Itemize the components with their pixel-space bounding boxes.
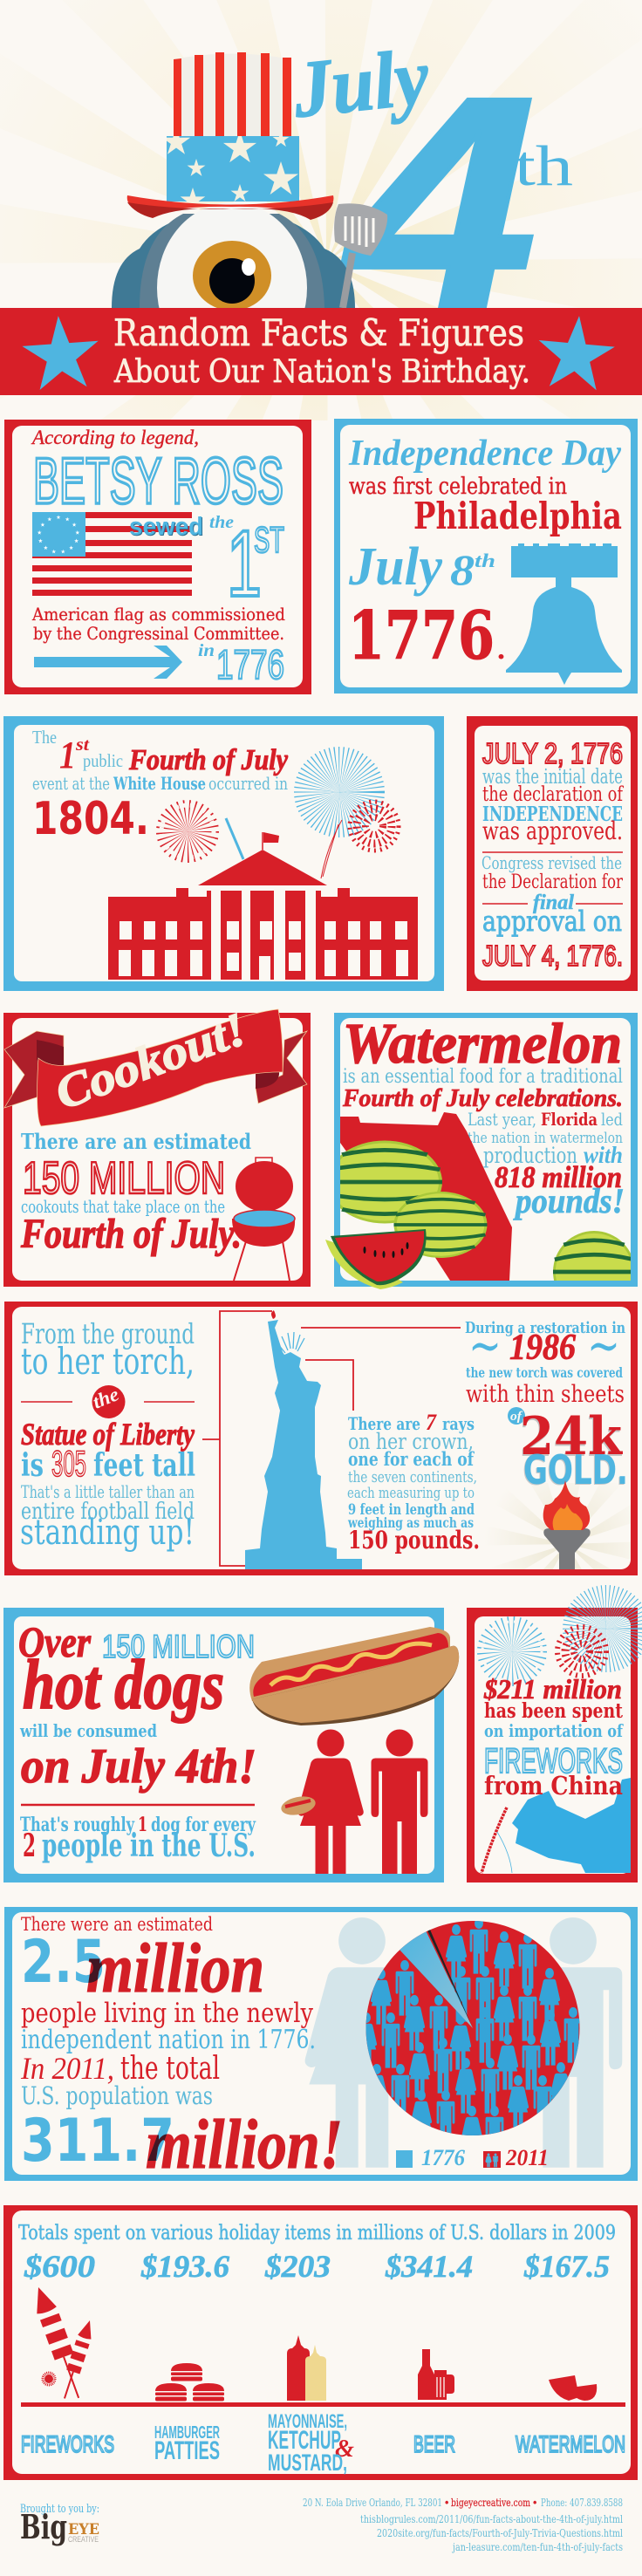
text: address <box>303 2496 623 2509</box>
th suffix: th <box>515 134 573 198</box>
heading: Fourth of July: Fourth of July <box>128 744 289 776</box>
icon: liberty bell <box>506 543 622 685</box>
text: on her crown: on her crown, <box>348 1429 474 1454</box>
text: last year Florida: Florida <box>541 1109 598 1130</box>
text: event at the White House: event at the <box>32 773 110 794</box>
icon: beer <box>418 2349 454 2400</box>
label: beer: BEER <box>413 2431 455 2457</box>
icon: china map <box>512 1778 631 1873</box>
hat star band <box>167 136 299 202</box>
icon: torch <box>543 1480 591 1569</box>
text: credit: Brought to you by: <box>20 2503 99 2516</box>
arrow <box>34 646 182 679</box>
heading: Statue of Liberty: Statue of Liberty <box>21 1417 195 1452</box>
value: patties: $193.6 <box>140 2249 229 2284</box>
text: million: million <box>86 1930 264 2007</box>
text: 818 million: 818 million <box>495 1160 622 1194</box>
text: estimated: There are an estimated <box>21 1129 251 1154</box>
icon: right star <box>535 312 618 392</box>
text: Over: Over <box>18 1617 91 1666</box>
text: roughly one dog: dog for every <box>151 1814 256 1836</box>
icon: american flag <box>32 512 192 596</box>
text: Fourth of July celebrations: Fourth of July celebrations. <box>342 1085 623 1112</box>
text: final: final <box>533 892 574 914</box>
panel: Independence Day <box>334 419 638 694</box>
text: sewed: sewed <box>129 513 203 541</box>
heading: Watermelon: Watermelon <box>343 1012 622 1076</box>
text: event at the White House: White House <box>113 773 206 794</box>
legend: 1776 <box>396 2145 465 2170</box>
background sun rays <box>109 44 545 480</box>
panel: July 2 1776 <box>467 716 638 991</box>
text: football field: entire football field <box>21 1499 195 1525</box>
text: is 305 feet tall <box>21 1443 195 1484</box>
icon: burgers <box>155 2363 224 2401</box>
text: is 305 feet tall: 305 <box>51 1443 86 1484</box>
panel: Cookout <box>3 1002 311 1287</box>
text: seven rays: There are <box>348 1413 420 1434</box>
icon: man and woman <box>297 1729 427 1874</box>
value: fireworks: $600 <box>24 2249 95 2284</box>
text: the: the <box>209 513 234 532</box>
text: 150 pounds: 150 pounds. <box>348 1526 480 1554</box>
text: american flag: American flag as commissioned <box>31 604 285 625</box>
text: 1804: 1804. <box>32 793 149 845</box>
line: torch callout <box>301 1327 461 1329</box>
label: hamburger patties: HAMBURGER <box>154 2423 220 2443</box>
value: beer: $341.4 <box>385 2249 473 2284</box>
text: July 8th <box>348 537 495 597</box>
heading: Independence Day: Independence Day <box>348 434 621 474</box>
icon: melon slices <box>549 2375 597 2401</box>
panel: Betsy Ross <box>4 420 311 694</box>
fireworks <box>482 1607 628 1681</box>
icon: ketchup and mustard <box>287 2335 326 2401</box>
text: Fourth of July: Fourth of July. <box>20 1211 242 1257</box>
text: roughly one dog: That's roughly <box>20 1814 135 1836</box>
iris <box>193 241 271 311</box>
panel: first public Fourth of July <box>3 716 444 991</box>
text: in 2011 the total <box>20 2051 220 2087</box>
bracket: height callout lines <box>202 1311 272 1566</box>
text: 1986 <box>468 1315 620 1377</box>
text: seven continents: the seven continents, <box>348 1468 477 1486</box>
text: each measuring: each measuring up to <box>347 1485 475 1502</box>
logo: Big Eye Creative: Big <box>20 2507 67 2546</box>
text: last year Florida: led <box>601 1109 623 1130</box>
text: pounds: pounds! <box>513 1181 625 1220</box>
heading: Betsy Ross: BETSY ROSS <box>33 444 283 517</box>
text: 9 feet: 9 feet in length and <box>348 1501 475 1519</box>
text: 1776: 1776 <box>216 641 284 687</box>
label: condiments: MAYONNAISE, <box>268 2410 347 2432</box>
text: 211 million: $211 million <box>483 1673 622 1705</box>
text: 24k: 24k <box>520 1406 623 1467</box>
eyeball body <box>112 209 355 308</box>
label: fireworks: FIREWORKS <box>21 2431 114 2457</box>
text: people living: people living in the newly <box>21 1998 313 2029</box>
panel: holiday spending <box>3 2205 638 2480</box>
text: seven rays: rays <box>442 1413 475 1434</box>
text: roughly one dog <box>20 1814 256 1836</box>
big numeral 4: 4 <box>337 32 537 376</box>
label: condiments: MUSTARD, <box>268 2450 347 2476</box>
text: population: U.S. population was <box>21 2081 213 2110</box>
text: 1776: 1776 <box>348 597 495 674</box>
panel: Statue of Liberty <box>4 1302 638 1588</box>
label: condiments: & <box>335 2436 354 2463</box>
icon: watermelon slice <box>325 1229 427 1289</box>
panel: population <box>4 1907 638 2183</box>
text: 1986: 1986 <box>509 1328 576 1368</box>
text: July 8th: 8 <box>450 545 475 594</box>
numeral: 1st: 1 <box>59 734 76 776</box>
text: one for each: one for each of <box>348 1448 475 1470</box>
text: will be consumed: will be consumed <box>19 1720 157 1741</box>
header banner <box>0 308 642 395</box>
panel: fireworks from China <box>467 1607 638 1882</box>
text: Cookout: Cookout! <box>49 1002 253 1119</box>
icon: pale background couple <box>305 1917 622 2168</box>
numeral: 1st <box>59 734 91 776</box>
text: from the ground: From the ground <box>21 1317 195 1350</box>
icon: statue of liberty <box>245 1310 362 1569</box>
text: according to legend: According to legend, <box>31 427 199 448</box>
hat stripes <box>174 54 291 136</box>
text: in: in <box>198 641 215 660</box>
rocket trails <box>482 1807 507 1873</box>
illustration: Florida and melons <box>340 1112 631 1281</box>
text: from China: from China <box>484 1771 623 1800</box>
badge: of <box>508 1407 525 1425</box>
text: event at the White House: occurred in <box>208 773 288 794</box>
text: July 8th: July <box>348 537 442 597</box>
line: crown callout <box>305 1360 353 1411</box>
text: committee: by the Congressinal Committee. <box>33 623 284 644</box>
text: July 8th: th <box>475 550 495 571</box>
text: production with: production <box>483 1143 577 1168</box>
text: 150 million: 150 MILLION <box>102 1629 255 1664</box>
text: is 305 feet tall: is <box>21 1447 44 1484</box>
text: to her torch: to her torch, <box>21 1340 195 1383</box>
text: event at the White House <box>32 773 288 794</box>
label: condiments: KETCHUP <box>268 2426 341 2455</box>
title word July: July <box>288 31 434 134</box>
text: estimated: There were an estimated <box>21 1914 213 1935</box>
heading: on July 4th: on July 4th! <box>21 1739 256 1794</box>
logo: Big Eye Creative: EYE <box>68 2521 99 2538</box>
spatula <box>343 253 352 308</box>
mascot: eyeball with uncle sam hat and spatula <box>112 52 387 308</box>
value: condiments: $203 <box>264 2249 331 2284</box>
text: taller than: That's a little taller than an <box>21 1481 195 1502</box>
text: standing up: standing up! <box>20 1513 195 1553</box>
panel: Watermelon <box>325 1012 638 1313</box>
text: two people: people in the U.S. <box>42 1828 256 1864</box>
ribbon banner <box>4 1002 307 1126</box>
text: last year Florida: Last year, <box>468 1109 536 1130</box>
text: 1776: . <box>496 635 506 666</box>
header illustration: July 4th title <box>288 31 573 376</box>
text: 1986: ~ <box>468 1315 502 1377</box>
value: watermelon: $167.5 <box>523 2249 610 2284</box>
heading: hot dogs: hot dogs <box>23 1647 224 1724</box>
text: million!: million! <box>146 2107 343 2183</box>
text: 150 million: 150 MILLION <box>23 1153 225 1204</box>
text: in 2011 the total: In 2011, <box>20 2051 114 2086</box>
text: first celebrated: was first celebrated in <box>349 474 567 500</box>
footer: brought to you by <box>20 2503 99 2546</box>
pie chart: population 1776 vs 2011 <box>366 1921 579 2135</box>
text: address: • <box>533 2497 536 2509</box>
icon: rockets <box>29 2284 97 2402</box>
text: address: 20 N. Eola Drive Orlando, FL 32801 <box>303 2496 442 2509</box>
text: independent nation: independent nation in 1776. <box>21 2025 316 2055</box>
fireworks <box>161 769 399 878</box>
text: in 2011 the total: the total <box>120 2051 220 2087</box>
icon: hot dog <box>249 1627 459 1725</box>
footer: address and sources <box>303 2496 623 2553</box>
label: condiments <box>268 2410 354 2476</box>
text: cookouts: cookouts that take place on the <box>21 1196 225 1217</box>
badge: the: the <box>90 1383 122 1413</box>
hat brim <box>127 195 333 217</box>
rays behind torch <box>523 1500 611 1588</box>
text: seven rays: 7 <box>426 1410 437 1435</box>
text: 2.5: 2.5 <box>21 1928 106 1997</box>
text: is 305 feet tall: feet tall <box>93 1447 195 1484</box>
text: two people: 2 <box>23 1828 36 1864</box>
icon: white house <box>108 832 418 980</box>
legend: 2011: 2011 <box>505 2145 549 2170</box>
label: hamburger patties <box>154 2423 220 2465</box>
text: public: public <box>83 750 123 771</box>
text: weighing: weighing as much as <box>347 1514 474 1531</box>
text: 311.7: 311.7 <box>21 2107 174 2176</box>
icon: grill <box>232 1158 295 1281</box>
label: hamburger patties: PATTIES <box>154 2436 220 2465</box>
legend: 2011 <box>483 2145 549 2170</box>
panel: hot dogs <box>3 1608 459 1882</box>
badge: of: of <box>510 1410 523 1424</box>
text: last year Florida <box>468 1109 623 1130</box>
numeral: 1st: 1 <box>227 510 262 616</box>
legend: 1776: 1776 <box>421 2145 465 2170</box>
text: seven rays <box>348 1410 475 1435</box>
banner headline: Random Facts & Figures <box>113 311 524 354</box>
icon: small hot dog <box>279 1794 318 1818</box>
text: 1986: ~ <box>587 1315 620 1377</box>
numeral: 1st: ST <box>254 519 284 560</box>
logo: Big Eye Creative: CREATIVE <box>68 2535 99 2544</box>
text: address: • <box>445 2497 448 2509</box>
text: two people <box>23 1828 256 1864</box>
text: address: bigeyecreative.com <box>451 2496 530 2509</box>
text: The: The <box>32 727 57 748</box>
text: roughly one dog: 1 <box>138 1814 147 1836</box>
icon: left star <box>20 313 101 391</box>
text: production with: with <box>584 1142 623 1168</box>
banner subheadline: About Our Nation's Birthday. <box>113 354 530 390</box>
numeral: 1st: st <box>75 735 91 755</box>
